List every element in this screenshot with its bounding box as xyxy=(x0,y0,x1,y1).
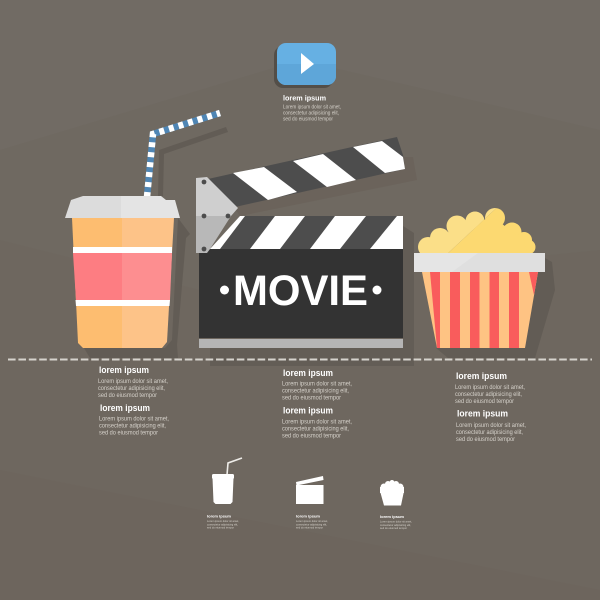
text block: cup 1: Lorem ipsum dolor sit amet, xyxy=(98,379,168,385)
text block: cup 2: consectetur adipisicing elit, xyxy=(99,424,166,430)
clapper hinge xyxy=(196,177,238,253)
text block: clapper 2: consectetur adipisicing elit, xyxy=(282,426,349,432)
text block: clapper 2: sed do eiusmod tempor xyxy=(282,434,341,440)
text block: small popcorn: Lorem ipsum dolor sit amet, xyxy=(380,520,412,524)
cup body xyxy=(72,218,174,348)
clapper arm xyxy=(208,137,405,207)
text block: popcorn 2: lorem ipsum xyxy=(457,408,508,418)
text block: small clapperboard: Lorem ipsum dolor sit amet, xyxy=(296,519,328,523)
text block: clapper 2: Lorem ipsum dolor sit amet, xyxy=(282,420,352,426)
text block: play: sed do eiusmod tempor xyxy=(283,116,333,122)
text block: cup 2: sed do eiusmod tempor xyxy=(99,430,158,436)
text block: popcorn 1: lorem ipsum xyxy=(456,371,507,381)
icon: play button xyxy=(274,43,336,88)
icon: small popcorn xyxy=(380,480,404,506)
clapper base xyxy=(199,339,403,348)
icon: small clapperboard xyxy=(296,476,324,504)
text block: clapper 1: Lorem ipsum dolor sit amet, xyxy=(282,382,352,388)
text block: small cup: sed do eiusmod tempor xyxy=(207,526,234,530)
icon: small cup xyxy=(212,458,242,504)
popcorn shadow xyxy=(436,258,555,358)
clapper stripes xyxy=(210,216,403,249)
text block: popcorn 1: Lorem ipsum dolor sit amet, xyxy=(455,385,525,391)
clapper title: MOVIE xyxy=(233,268,368,315)
text block: play xyxy=(283,94,341,122)
text block: cup 1: sed do eiusmod tempor xyxy=(98,393,157,399)
popcorn kernels xyxy=(418,208,536,257)
text block: popcorn 1: consectetur adipisicing elit, xyxy=(455,392,522,398)
text block: small cup: consectetur adipisicing elit, xyxy=(207,522,238,526)
text block: popcorn 1 xyxy=(455,371,525,405)
text block: small popcorn xyxy=(380,515,412,530)
text block: cup 2: lorem ipsum xyxy=(100,403,150,413)
cup lid xyxy=(65,196,180,218)
clapper body xyxy=(199,249,403,338)
cup straw xyxy=(147,113,220,197)
dashed divider xyxy=(8,358,592,360)
text block: play: consectetur adipisicing elit, xyxy=(283,110,339,116)
cup shadow xyxy=(84,127,228,358)
popcorn bucket xyxy=(422,272,538,348)
text block: cup 1: lorem ipsum xyxy=(99,365,149,375)
text block: small popcorn: consectetur adipisicing elit, xyxy=(380,523,411,527)
text block: popcorn 2 xyxy=(456,408,526,443)
text block: small cup xyxy=(207,514,239,530)
text block: play: Lorem ipsum dolor sit amet, xyxy=(283,105,341,111)
text block: clapper 1: consectetur adipisicing elit, xyxy=(282,388,349,394)
text block: cup 1: consectetur adipisicing elit, xyxy=(98,386,165,392)
text block: small popcorn: sed do eiusmod tempor xyxy=(380,526,407,530)
text block: clapper 1 xyxy=(282,368,352,402)
text block: small cup: lorem ipsum xyxy=(207,514,231,518)
icon: drink cup xyxy=(65,113,220,348)
text block: small cup: Lorem ipsum dolor sit amet, xyxy=(207,519,239,523)
text block: clapper 2 xyxy=(282,406,352,440)
text block: cup 1 xyxy=(98,365,168,399)
text block: popcorn 2: consectetur adipisicing elit, xyxy=(456,430,523,436)
text block: small clapperboard: sed do eiusmod tempor xyxy=(296,526,323,530)
text block: small clapperboard: consectetur adipisicing elit, xyxy=(296,522,327,526)
clapperboard shadow xyxy=(210,157,417,366)
icon: popcorn xyxy=(414,208,545,348)
text block: play: lorem ipsum xyxy=(283,94,326,102)
text block: cup 2: Lorem ipsum dolor sit amet, xyxy=(99,416,169,422)
popcorn band xyxy=(414,253,545,272)
text block: popcorn 2: sed do eiusmod tempor xyxy=(456,437,515,443)
text block: popcorn 2: Lorem ipsum dolor sit amet, xyxy=(456,423,526,429)
text block: popcorn 1: sed do eiusmod tempor xyxy=(455,399,514,405)
text block: clapper 2: lorem ipsum xyxy=(283,406,333,416)
text block: cup 2 xyxy=(99,403,169,436)
icon: clapperboard xyxy=(196,137,405,348)
text block: small clapperboard: lorem ipsum xyxy=(296,514,320,518)
text block: clapper 1: sed do eiusmod tempor xyxy=(282,396,341,402)
text block: clapper 1: lorem ipsum xyxy=(283,368,333,378)
text block: small clapperboard xyxy=(296,514,328,530)
text block: small popcorn: lorem ipsum xyxy=(380,515,404,519)
